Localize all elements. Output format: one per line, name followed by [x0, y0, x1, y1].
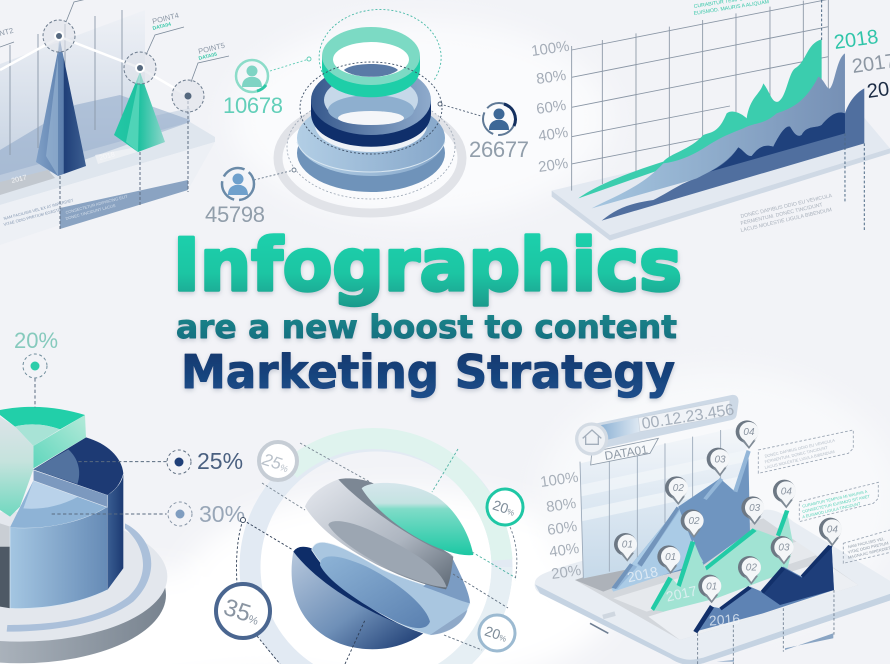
panel: pyramid chart top left: CONSECTETUR ADIPISCING ELIT — [65, 193, 129, 215]
axis labels: tablet chart: 60% — [546, 518, 578, 539]
panel: tablet chart: VITAE ODIO PRETIUM — [847, 540, 889, 555]
panel: tablet chart: A EUISMOD LIGULA TINCIDUNT — [802, 501, 862, 519]
stat: 26677: 26677 — [469, 137, 529, 162]
axis labels: area chart: 40% — [537, 124, 569, 145]
series labels: 2018 — [833, 26, 880, 54]
pin: 2016-03 — [771, 536, 794, 565]
pin: 2016-03: 03 — [778, 543, 790, 554]
base shadow ring — [278, 103, 462, 213]
header bar — [575, 395, 739, 465]
area: 2016 — [602, 88, 864, 221]
panel: area chart top right — [552, 0, 890, 241]
panel: pyramid chart top left: 2018 — [99, 151, 116, 162]
axis labels: area chart: 80% — [535, 67, 567, 88]
chart back wall — [0, 10, 190, 175]
marker: 25% — [167, 450, 191, 474]
stat: 10678: 10678 — [223, 93, 283, 118]
connector lines — [254, 57, 481, 180]
badge: 20% blue — [479, 615, 515, 651]
dashed orbit circles — [300, 9, 442, 154]
badge: 35%: 35% — [220, 594, 264, 631]
pedestal — [0, 512, 167, 663]
header bar: DATA01 — [604, 442, 649, 463]
data point 5 — [172, 80, 204, 112]
panel: tablet chart: CURABITUR TEMPUS MI MAURIS A — [802, 489, 868, 509]
platform — [0, 122, 215, 205]
teal ring — [322, 27, 420, 97]
badge: 25% — [259, 442, 297, 480]
line chart — [0, 37, 188, 230]
grid — [572, 0, 828, 191]
axis labels: tablet chart: 40% — [548, 540, 580, 561]
panel: pyramid chart top left: DONEC TINCIDUNT LACUS — [65, 203, 116, 221]
small captions: area chart — [693, 0, 833, 234]
pin: 2017-03 — [741, 496, 764, 525]
pin: 2016-04: 04 — [827, 524, 838, 535]
navy ring — [311, 65, 431, 147]
series labels: 2017 — [665, 582, 699, 605]
panel: stacked rings — [205, 9, 529, 227]
dashed drop lines — [698, 590, 834, 664]
icon: user 10678 — [236, 60, 268, 92]
slice: teal 20% — [0, 407, 86, 517]
panel: tablet chart: FERMENTUM. DONEC TINCIDUNT — [764, 445, 829, 464]
pin: 2018-02 — [665, 476, 688, 505]
pyramid: navy — [36, 40, 86, 176]
pin: 2016-01 — [698, 575, 721, 603]
axis labels: area chart: 20% — [537, 155, 569, 176]
pin: 2018-03: 03 — [714, 454, 726, 465]
title line 2: are a new boost to content — [176, 308, 677, 346]
pin: 2017-03: 03 — [749, 503, 761, 514]
sphere: middle disc — [312, 542, 470, 635]
axis labels: area chart: 100% — [530, 38, 571, 60]
pin: 2017-02 — [681, 509, 704, 538]
icon: user 26677 — [483, 103, 515, 135]
series labels — [626, 563, 741, 629]
dashed note boxes — [758, 430, 890, 563]
caption text: NAM FACILISIS VEL EX AT IMPERDIET — [3, 197, 75, 221]
title — [173, 223, 682, 399]
stat: 45798: 45798 — [205, 202, 265, 227]
pin: 2018-04 — [736, 420, 759, 449]
badge: 20% blue: 20% — [483, 623, 509, 645]
small captions: area chart: DONEC DAPIBUS ODIO EU VEHICULA — [740, 193, 833, 220]
sphere pieces — [292, 478, 473, 649]
axis labels: area chart — [530, 38, 571, 176]
sphere: bottom hemisphere — [292, 552, 423, 649]
chart back wall — [580, 425, 747, 578]
header bar: 00.12.23.456 — [641, 402, 736, 433]
series labels — [833, 26, 890, 103]
small captions: area chart: LACUS MOLESTIE LIGULA BIBENDUM — [740, 207, 832, 234]
panel: tablet chart: MAGNA AC IMPERDIET — [847, 545, 890, 560]
axis labels: area chart: 60% — [535, 97, 567, 118]
platform — [552, 117, 890, 241]
panel: 3D pie chart — [0, 378, 167, 663]
series labels: 2018 — [626, 563, 660, 585]
axis labels: tablet chart: 20% — [550, 562, 582, 583]
point labels: DATA05 — [198, 52, 218, 62]
panel: sphere chart — [216, 438, 523, 664]
dashed connectors — [35, 378, 167, 514]
marker: 30% — [168, 502, 192, 526]
area: 2017 — [592, 53, 845, 208]
pin: 2017-01 — [657, 545, 680, 574]
panel: pyramid chart top left — [0, 0, 229, 245]
data point 4 — [124, 52, 156, 84]
mountain: 2016 — [693, 545, 834, 633]
panel: tablet chart: CONSECTETUR EUISMOD SIT AMET — [802, 493, 871, 514]
pin: 2018-02: 02 — [673, 483, 684, 494]
axis labels: tablet chart — [539, 469, 582, 583]
badge: 35% — [216, 584, 270, 638]
map pins — [614, 420, 842, 603]
sphere: grey slice — [305, 479, 453, 589]
data point 3 — [43, 20, 75, 52]
pin: 2018-04: 04 — [743, 427, 755, 438]
label: 20%: 20% — [14, 328, 58, 353]
dashed spokes — [237, 443, 517, 664]
dashed drop lines — [822, 0, 864, 230]
pin: 2017-04 — [773, 480, 796, 508]
point labels — [0, 0, 229, 82]
badge: 25%: 25% — [259, 449, 292, 476]
pin: 2017-04: 04 — [781, 486, 792, 497]
tablet body — [535, 510, 890, 664]
marker: 20% — [23, 354, 47, 378]
icon: user 45798 — [222, 168, 254, 200]
pin: 2016-01: 01 — [706, 581, 717, 592]
slice: grey dark — [0, 547, 10, 608]
mountain: 2017 — [651, 510, 793, 612]
panel: pyramid chart top left: 2017 — [11, 174, 28, 185]
label: 30%: 30% — [199, 501, 245, 527]
pin: 2018-01: 01 — [622, 540, 633, 551]
pin: 2018-03 — [707, 448, 730, 476]
point labels: POINT5 — [197, 41, 226, 56]
panel: tablet chart — [535, 395, 890, 664]
axis labels: tablet chart: 100% — [539, 469, 580, 491]
point labels: DATA04 — [152, 22, 172, 32]
pyramid: teal — [114, 72, 165, 152]
pin: 2016-04 — [819, 518, 842, 546]
area: 2018 — [578, 39, 822, 198]
badge: 20% teal — [487, 489, 523, 525]
pin: 2016-02 — [738, 556, 761, 585]
bottom ring — [297, 98, 445, 192]
mountain: 2018 — [612, 450, 751, 592]
badge: 20% teal: 20% — [491, 497, 517, 519]
pin: 2018-01 — [614, 533, 637, 562]
pin: 2017-02: 02 — [688, 516, 700, 527]
title line 1: Infographics — [173, 223, 682, 307]
axis labels: tablet chart: 80% — [545, 495, 577, 516]
point labels: POINT4 — [151, 11, 180, 26]
panel: tablet chart: LACUS MOLESTIE LIGULA BIBENDUM — [764, 449, 835, 470]
caption text: VITAE ODIO PRETIUM EGESTAS — [3, 206, 64, 227]
panel: tablet chart: NAM FACILISIS VEL — [847, 536, 886, 549]
sphere: teal cap — [362, 483, 473, 555]
pin: 2016-02: 02 — [746, 563, 757, 574]
label: 25%: 25% — [197, 448, 243, 474]
slice: light blue 30% — [10, 481, 107, 609]
panel: tablet chart: DONEC DAPIBUS ODIO EU VEHICULA — [764, 437, 836, 459]
series labels: 2016 — [708, 610, 741, 629]
outer ring — [250, 438, 502, 664]
title line 3: Marketing Strategy — [181, 345, 675, 399]
pin: 2017-01: 01 — [665, 552, 676, 563]
small captions: area chart: FERMENTUM. DONEC TINCIDUNT — [740, 202, 824, 227]
slice: navy 25% — [33, 437, 123, 590]
